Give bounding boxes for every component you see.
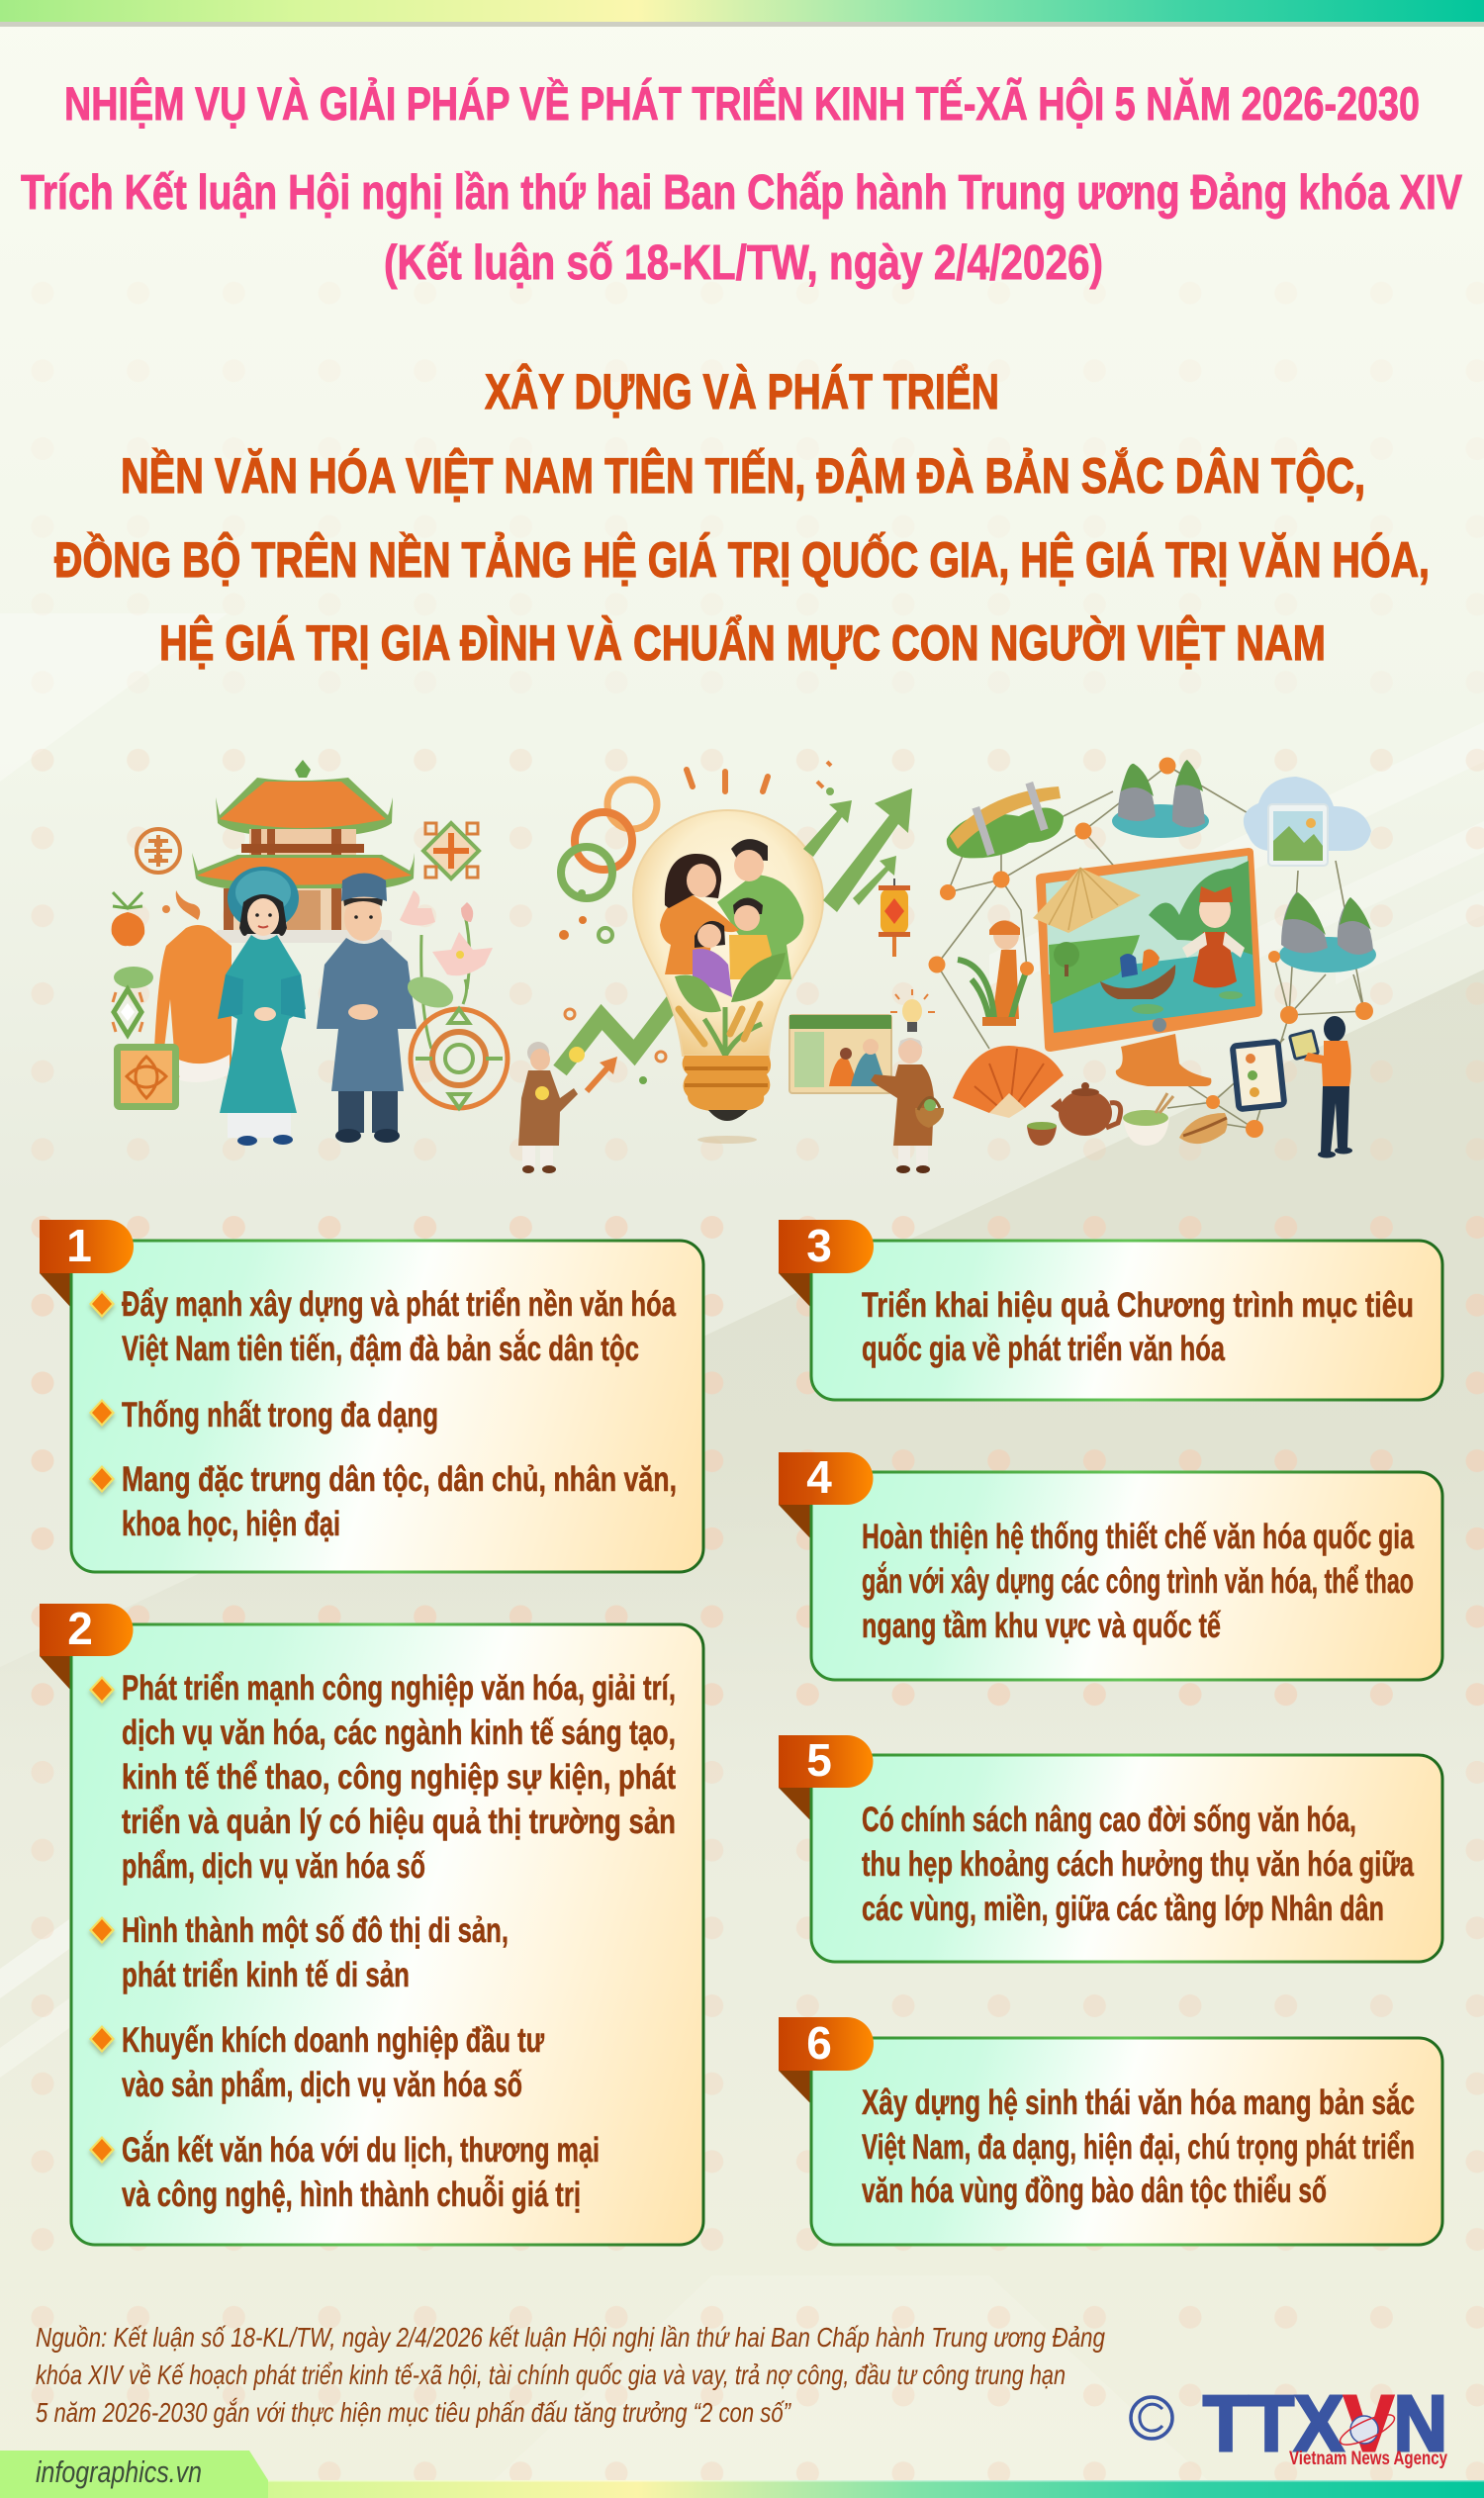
icon: interlocked rings (561, 780, 657, 898)
text: item 2: phẩm, dịch vụ văn hóa số (122, 1847, 425, 1886)
text: item 1 (122, 1285, 677, 1543)
text: item 2: vào sản phẩm, dịch vụ văn hóa số (122, 2066, 522, 2104)
icon: geometric diamond pattern right (423, 823, 479, 879)
icon: old man with basket (871, 1038, 944, 1173)
text: item 6 (862, 2082, 1415, 2210)
text: item 1: Mang đặc trưng dân tộc, dân chủ, nhân văn, (122, 1460, 677, 1499)
panel: item 3 (779, 1220, 1442, 1400)
icon: small bulb (890, 989, 935, 1032)
bottom gradient bar (0, 2480, 1484, 2498)
icon: food bowl and banh mi (1123, 1093, 1227, 1146)
icon: man in blue ao dai (317, 873, 417, 1143)
badge: number 3 (779, 1220, 874, 1273)
bullets (89, 1676, 115, 2164)
text: source note (36, 2322, 1105, 2428)
badge: number 2: 2 (67, 1603, 93, 1654)
title: tasks and solutions, source conclusion: (Kết luận số 18-KL/TW, ngày 2/4/2026) (384, 236, 1103, 290)
icon: karst island right (1279, 892, 1376, 972)
badge: number 5: 5 (806, 1734, 832, 1786)
icon: phone and person with tablet (1229, 1016, 1352, 1157)
text: item 2: triển và quản lý có hiệu quả thị trường sản (122, 1803, 676, 1841)
text: item 2: kinh tế thể thao, công nghiệp sự kiện, phát (122, 1758, 676, 1797)
badge: number 4 (779, 1451, 873, 1505)
icon: karst island top (1112, 760, 1209, 838)
icon: square mooncake pattern (114, 1044, 179, 1110)
icon: woman in blue ao dai (218, 867, 306, 1146)
text: item 3 (862, 1286, 1414, 1368)
text: item 2: và công nghệ, hình thành chuỗi giá trị (122, 2174, 581, 2214)
badge: number 3: 3 (806, 1220, 832, 1271)
icon: big round motif (411, 1009, 508, 1108)
icon: round motif (137, 829, 180, 873)
logo: TTXVN copyright: Vietnam News Agency (1289, 2449, 1447, 2469)
icon: network nodes (928, 758, 1373, 1138)
text: item 2: dịch vụ văn hóa, các ngành kinh tế sáng tạo, (122, 1713, 676, 1752)
text: item 2: Hình thành một số đô thị di sản, (122, 1911, 509, 1950)
text: item 2 (122, 1669, 676, 2214)
icon: water puppet with rice (958, 920, 1027, 1026)
icon: small window with bamboo scene (789, 1015, 891, 1093)
main heading: building Vietnamese culture: XÂY DỰNG VÀ PHÁT TRIỂN (485, 364, 999, 419)
title: tasks and solutions, source conclusion (21, 77, 1462, 290)
icon: teapot and cup (1027, 1082, 1121, 1146)
illustration: culture, family and digital network (112, 758, 1376, 1173)
icon: orange ao dai (154, 925, 232, 1082)
panel: item 1 (40, 1220, 703, 1572)
badge: number 6 (779, 2017, 874, 2071)
icon: old woman with light (518, 1042, 585, 1173)
icon: small decorations (114, 890, 200, 988)
text: item 5 (862, 1801, 1414, 1928)
badge: number 1 (40, 1220, 134, 1273)
text: source note: 5 năm 2026-2030 gắn với thực hiện mục tiêu phấn đấu tăng trưởng “2 con số” (36, 2397, 791, 2428)
bullets (89, 1290, 115, 1493)
text: item 1: Đẩy mạnh xây dựng và phát triển nền văn hóa (122, 1285, 676, 1324)
network lines (937, 766, 1364, 1129)
badge: number 6: 6 (806, 2017, 832, 2069)
icon: lotus flowers and pad (400, 890, 493, 1049)
panel: item 2 (40, 1603, 703, 2245)
text: item 3: quốc gia về phát triển văn hóa (862, 1330, 1225, 1368)
text: item 2: Gắn kết văn hóa với du lịch, thương mại (122, 2130, 600, 2170)
main heading: building Vietnamese culture (54, 364, 1430, 671)
text: item 1: Việt Nam tiên tiến, đậm đà bản sắc dân tộc (122, 1329, 639, 1368)
top gradient bar (0, 0, 1484, 27)
icon: cloud with picture (1244, 777, 1371, 866)
text: item 1: khoa học, hiện đại (122, 1505, 340, 1543)
icon: diamond pattern left (113, 989, 142, 1035)
text: source note: khóa XIV về Kế hoạch phát triển kinh tế-xã hội, tài chính quốc gia và vay, trả nợ công, đầu tư công trung hạn (36, 2359, 1066, 2390)
icon: knot ornament (112, 892, 144, 946)
logo: TTXVN copyright: TTXVN (1203, 2379, 1447, 2467)
panel: item 4 (779, 1451, 1442, 1680)
text: item 4 (862, 1518, 1414, 1645)
text: item 4: ngang tầm khu vực và quốc tế (862, 1607, 1221, 1645)
panel: item 6 (779, 2017, 1442, 2245)
text: item 2: phát triển kinh tế di sản (122, 1956, 410, 1994)
icon: lantern (879, 879, 910, 957)
website tab: infographics.vn (36, 2454, 202, 2489)
icon: computer monitor with Vietnamese landscape (1033, 848, 1262, 1086)
website tab (0, 2451, 268, 2498)
text: item 2: Phát triển mạnh công nghiệp văn hóa, giải trí, (122, 1669, 676, 1708)
icon: light bulb with family and plant (633, 770, 823, 1144)
icon: pagoda (192, 760, 415, 943)
panel: item 5 (779, 1734, 1442, 1962)
icon: orange fan (953, 1046, 1064, 1118)
text: item 2: Khuyến khích doanh nghiệp đầu tư (122, 2021, 544, 2060)
badge: number 2 (40, 1603, 133, 1656)
badge: number 5 (779, 1734, 873, 1788)
badge: number 1: 1 (66, 1220, 92, 1271)
text: item 1: Thống nhất trong đa dạng (122, 1396, 438, 1434)
arrow: green growth arrows (803, 762, 912, 912)
badge: number 4: 4 (806, 1451, 832, 1503)
arrow: zigzag growth (559, 889, 683, 1091)
icon: bridge island (947, 782, 1064, 858)
text: source note: Nguồn: Kết luận số 18-KL/TW, ngày 2/4/2026 kết luận Hội nghị lần thứ hai Ban Chấp hành Trung ương Đảng (36, 2322, 1105, 2353)
